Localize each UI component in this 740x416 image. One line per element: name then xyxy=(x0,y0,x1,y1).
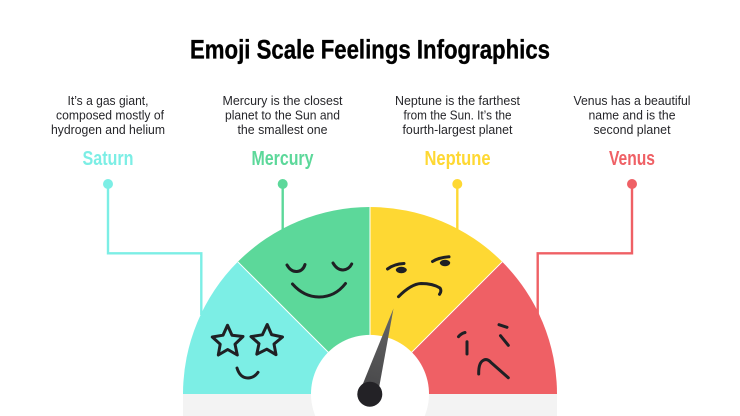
segment: Saturn with star eyes emoji xyxy=(183,262,370,394)
text block: Venus description xyxy=(574,93,691,137)
text block: Neptune description: fourth-largest planet xyxy=(402,122,513,137)
heading: Venus: Venus xyxy=(609,148,655,170)
icon: closed eyes xyxy=(287,263,352,272)
column: Venus xyxy=(538,93,691,315)
connector: Venus xyxy=(538,179,637,315)
text block: Mercury description: planet to the Sun and xyxy=(225,108,340,122)
icon: annoyed brows and eyes xyxy=(388,257,450,273)
text block: Saturn description xyxy=(51,93,165,137)
gauge hub xyxy=(311,335,429,416)
connector: Mercury xyxy=(278,179,288,235)
text block: Saturn description: composed mostly of xyxy=(56,108,164,122)
column: Mercury xyxy=(222,93,343,235)
icon: small smile xyxy=(237,368,258,378)
segment: Mercury with content emoji xyxy=(238,207,370,394)
text block: Venus description: name and is the xyxy=(588,108,676,122)
needle xyxy=(357,308,394,407)
heading: Mercury: Mercury xyxy=(252,148,314,170)
icon: wide smile xyxy=(292,284,346,297)
gauge xyxy=(183,207,557,394)
icon: sad eyes xyxy=(458,325,508,354)
segment: Venus with sad emoji xyxy=(370,262,557,394)
column: Neptune xyxy=(395,93,520,235)
text block: Mercury description: Mercury is the closest xyxy=(222,93,343,108)
text block: Saturn description: It’s a gas giant, xyxy=(68,93,148,108)
column: Saturn xyxy=(51,93,201,315)
text block: Venus description: second planet xyxy=(594,122,671,137)
text block: Venus description: Venus has a beautiful xyxy=(574,93,691,108)
icon: frown xyxy=(398,284,441,297)
text block: Mercury description xyxy=(222,93,343,137)
segment: Neptune with annoyed emoji xyxy=(370,207,502,394)
segment dividers xyxy=(238,207,502,394)
icon: sad mouth xyxy=(479,360,508,378)
text block: Neptune description xyxy=(395,93,520,137)
text block: Mercury description: the smallest one xyxy=(238,122,328,137)
connector: Neptune xyxy=(452,179,462,235)
heading: Saturn: Saturn xyxy=(82,148,134,170)
heading: Neptune: Neptune xyxy=(424,148,490,170)
title: Emoji Scale Feelings Infographics xyxy=(190,34,550,64)
text block: Neptune description: from the Sun. It’s the xyxy=(404,108,512,122)
text block: Neptune description: Neptune is the farthest xyxy=(395,93,520,108)
text block: Saturn description: hydrogen and helium xyxy=(51,122,165,137)
gauge base xyxy=(183,394,557,416)
connector: Saturn xyxy=(103,179,201,315)
icon: star eyes xyxy=(212,324,282,355)
